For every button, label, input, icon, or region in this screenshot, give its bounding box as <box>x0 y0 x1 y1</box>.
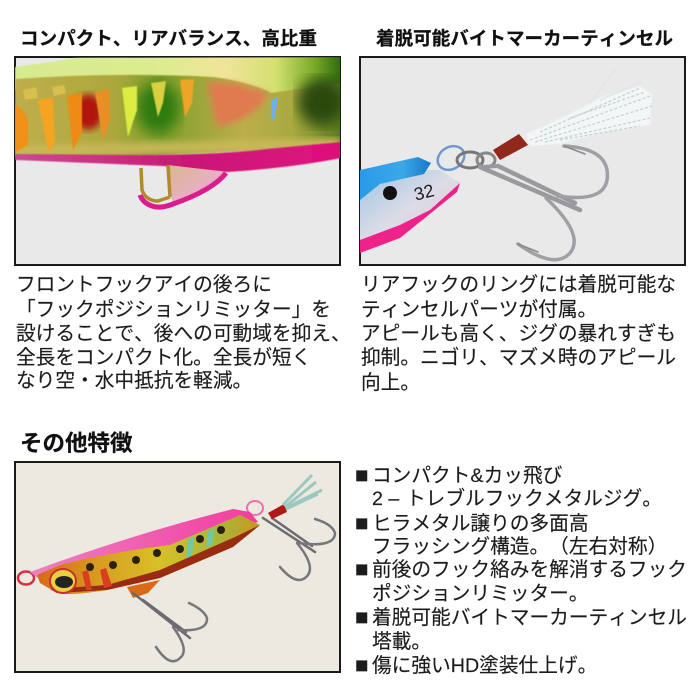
feature bullet list: コンパクト&カッ飛び <box>372 465 563 487</box>
text block: front hook eye: なり空・水中抵抗を軽減。 <box>16 370 252 392</box>
split ring <box>436 144 496 172</box>
feature bullet list: ■ <box>355 607 368 627</box>
panel: jig close-up photo <box>15 57 346 265</box>
feature bullet list: ■ <box>355 559 368 579</box>
text block: rear hook ring: 向上。 <box>361 372 420 394</box>
text block: front hook eye <box>16 274 351 392</box>
red thread wrap <box>268 504 287 519</box>
belly fin <box>127 580 160 598</box>
feature bullet list: 傷に強いHD塗装仕上げ。 <box>372 655 597 677</box>
feature bullet list: ■ <box>355 513 368 533</box>
front treble hook <box>133 593 207 661</box>
feature bullet list: 着脱可能バイトマーカーティンセル <box>372 607 687 629</box>
feature bullet list: 前後のフック絡みを解消するフック <box>372 559 687 581</box>
panel: tinsel close-up photo <box>360 57 685 265</box>
text block: front hook eye: 設けることで、後への可動域を抑え、 <box>16 323 351 345</box>
heading: detachable bite marker: 着脱可能バイトマーカーティンセル <box>376 28 673 49</box>
orange scale marks <box>15 79 194 152</box>
rear ring <box>247 501 263 515</box>
tinsel tuft <box>283 475 322 509</box>
treble hook <box>480 146 607 260</box>
feature bullet list: 塔載。 <box>372 631 431 653</box>
rear treble hook <box>263 518 335 580</box>
pink belly stripe <box>15 142 341 172</box>
jig olive flank <box>15 75 341 156</box>
text block: rear hook ring: アピールも高く、ジグの暴れすぎも <box>361 323 676 345</box>
text block: rear hook ring: ティンセルパーツが付属。 <box>361 299 597 321</box>
teal flashes <box>186 528 214 558</box>
tinsel tuft <box>526 67 652 146</box>
feature bullet list: ■ <box>355 465 368 485</box>
text block: front hook eye: 「フックポジションリミッター」を <box>16 299 331 321</box>
feature bullet list: ポジションリミッター。 <box>372 583 589 605</box>
dark green and red shading <box>15 78 346 156</box>
eye <box>50 569 76 593</box>
jig tail body <box>360 157 460 253</box>
feature bullet list: 2 – <box>372 488 399 510</box>
spots <box>86 526 225 571</box>
feature bullet list: ヒラメタル譲りの多面高 <box>372 513 589 535</box>
number 32: 32 <box>412 180 436 205</box>
text block: rear hook ring: 抑制。ニゴリ、マズメ時のアピール <box>361 347 676 369</box>
iridescent highlight <box>271 97 278 122</box>
text block: front hook eye: 全長をコンパクト化。全長が短く <box>16 347 311 369</box>
feature bullet list: フラッシング構造。（左右対称） <box>372 536 667 558</box>
feature bullet list: ■ <box>355 655 368 675</box>
text block: front hook eye: フロントフックアイの後ろに <box>16 274 272 296</box>
gold hook eye ring <box>141 165 170 201</box>
heading: compact rear balance: コンパクト、リアバランス、高比重 <box>20 28 317 49</box>
dark red belly stripe <box>50 525 260 593</box>
fin pink edge <box>140 173 226 207</box>
nose ring <box>18 572 34 584</box>
panel: full jig photo <box>15 462 340 672</box>
red head bars <box>82 568 112 590</box>
text block: rear hook ring <box>361 274 676 394</box>
gold flank <box>37 515 260 594</box>
text block: rear hook ring: リアフックのリングには着脱可能な <box>361 274 676 296</box>
jig upper lime band <box>15 57 341 95</box>
hook eye fin <box>170 165 226 202</box>
pink back <box>30 509 258 578</box>
feature bullet list: トレブルフックメタルジグ。 <box>406 487 662 510</box>
heading: other features: その他特徴 <box>20 431 133 456</box>
red thread wrap <box>493 134 528 160</box>
feature bullet list <box>355 465 687 677</box>
jig eye dot <box>383 186 397 200</box>
